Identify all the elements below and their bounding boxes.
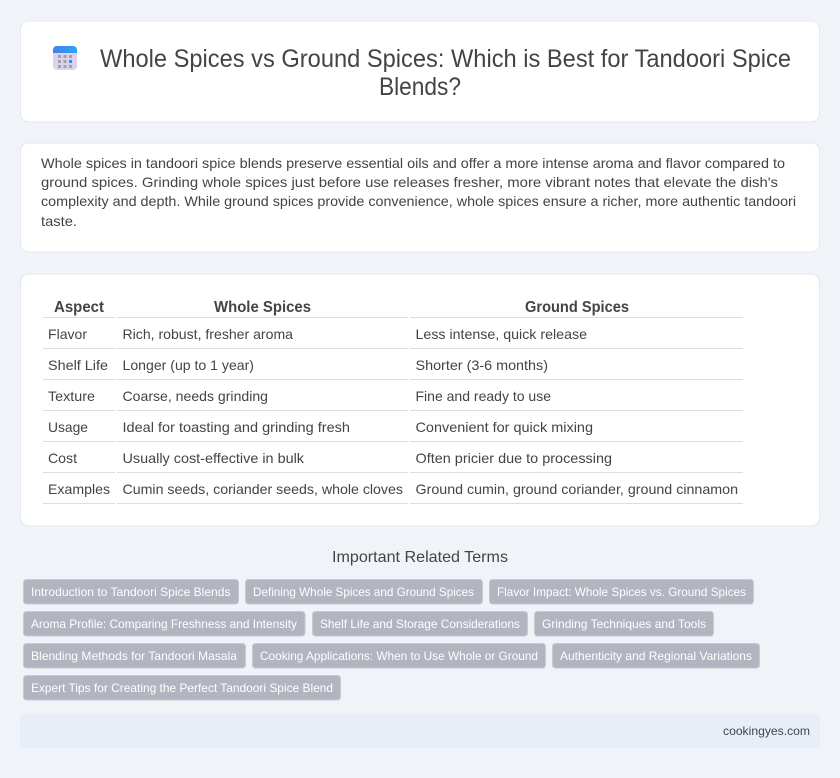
footer [20, 714, 820, 748]
row: cost: Cost [48, 450, 77, 466]
tag: Authenticity and Regional Variations [560, 649, 752, 663]
row: usage: Convenient for quick mixing [416, 419, 593, 435]
row: shelf life: Shelf Life [48, 357, 108, 373]
row: examples [43, 481, 743, 504]
title [100, 45, 791, 101]
panel: header [20, 21, 820, 122]
row: usage: Usage [48, 419, 88, 435]
tag: Defining Whole Spices and Ground Spices [253, 585, 474, 599]
table header: Ground Spices [525, 299, 629, 316]
panel: related term tags [24, 580, 760, 700]
tag: Shelf Life and Storage Considerations [320, 617, 520, 631]
table header [43, 299, 743, 318]
table header: Whole Spices [214, 299, 311, 316]
title: Blends? [379, 73, 461, 101]
tag [312, 612, 528, 636]
tag [246, 580, 482, 604]
tag: Grinding Techniques and Tools [542, 617, 706, 631]
tag [24, 644, 246, 668]
row: cost [43, 450, 743, 473]
tag: Expert Tips for Creating the Perfect Tandoori Spice Blend [31, 681, 333, 695]
row: cost: Usually cost-effective in bulk [122, 450, 305, 466]
text block: intro: Whole spices in tandoori spice blends preserve essential oils and offer a more intense aroma and flavor compared to [41, 155, 785, 171]
row: examples: Ground cumin, ground coriander, ground cinnamon [416, 481, 738, 497]
tag: Cooking Applications: When to Use Whole or Ground [260, 649, 538, 663]
row: usage: Ideal for toasting and grinding fresh [122, 419, 350, 435]
row: texture: Texture [48, 388, 95, 404]
row: flavor: Less intense, quick release [416, 326, 587, 342]
footer: cookingyes.com [723, 724, 810, 738]
row: usage [43, 419, 743, 442]
tag [24, 676, 340, 700]
row: shelf life: Longer (up to 1 year) [122, 357, 254, 373]
tag: Blending Methods for Tandoori Masala [31, 649, 237, 663]
icon: calendar [53, 46, 77, 70]
tag [252, 644, 546, 668]
tag: Aroma Profile: Comparing Freshness and Intensity [31, 617, 297, 631]
text block: intro: ground spices. Grinding whole spices just before use releases fresher, more vibrant notes that elevate the dish's [41, 174, 778, 190]
tag: Flavor Impact: Whole Spices vs. Ground Spices [497, 585, 746, 599]
row: texture: Fine and ready to use [416, 388, 551, 404]
panel: comparison table [20, 274, 820, 526]
row: flavor: Rich, robust, fresher aroma [122, 326, 293, 342]
text block: intro: complexity and depth. While ground spices provide convenience, whole spices ensure a richer, more authentic tandoori [41, 193, 796, 209]
row: shelf life [43, 357, 743, 380]
row: cost: Often pricier due to processing [416, 450, 612, 466]
text block: intro [41, 155, 796, 229]
title: Whole Spices vs Ground Spices: Which is Best for Tandoori Spice [100, 45, 791, 73]
tag [490, 580, 754, 604]
row: texture: Coarse, needs grinding [122, 388, 268, 404]
panel: intro paragraph [20, 143, 820, 252]
row: examples: Examples [48, 481, 110, 497]
tag [24, 580, 238, 604]
heading: related terms: Important Related Terms [332, 549, 508, 566]
row: examples: Cumin seeds, coriander seeds, whole cloves [122, 481, 403, 497]
row: texture [43, 388, 743, 411]
tag: Introduction to Tandoori Spice Blends [31, 585, 230, 599]
text block: intro: taste. [41, 213, 77, 229]
row: flavor: Flavor [48, 326, 87, 342]
row: flavor [43, 326, 743, 349]
tag [24, 612, 305, 636]
row: shelf life: Shorter (3-6 months) [416, 357, 548, 373]
tag [552, 644, 760, 668]
table header: Aspect [54, 299, 105, 316]
tag [534, 612, 714, 636]
